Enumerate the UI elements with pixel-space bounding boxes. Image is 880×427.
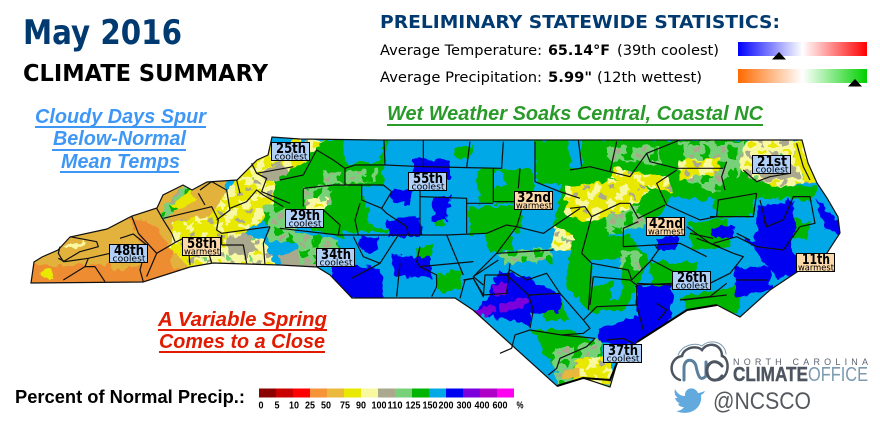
logo: north carolina climate office — [672, 342, 868, 386]
temperature statistic: (39th coolest) — [617, 43, 719, 59]
heading: variable spring — [157, 308, 327, 353]
label: 55th coolest: 55th — [413, 171, 443, 187]
legend tick labels: 90 — [356, 400, 366, 412]
south-east green and tip — [530, 328, 600, 375]
east green — [713, 190, 755, 218]
panel: preliminary statewide statistics — [380, 12, 867, 86]
icon: cloud with NC — [672, 342, 728, 380]
legend tick labels: 5 — [274, 400, 280, 412]
precipitation gauge — [738, 69, 867, 86]
label: 48th coolest — [110, 243, 148, 264]
legend tick labels: 50 — [321, 400, 331, 412]
heading: cloudy days: Cloudy Days Spur — [35, 105, 207, 128]
precipitation statistic — [380, 70, 702, 86]
county lines — [58, 163, 293, 282]
heading: wet weather: Wet Weather Soaks Central, Coastal NC — [387, 103, 764, 125]
state outline and coast — [31, 137, 840, 387]
icon: twitter bird — [675, 388, 705, 413]
purple — [476, 283, 528, 316]
temperature statistic: Average Temperature: — [380, 43, 542, 59]
legend tick labels: 25 — [305, 400, 315, 412]
statistics heading: PRELIMINARY STATEWIDE STATISTICS: — [380, 12, 780, 33]
legend tick labels: 200 — [438, 400, 454, 412]
label: 48th coolest: 48th — [114, 243, 144, 259]
heading: variable spring: A Variable Spring — [157, 308, 327, 331]
label: 37th coolest — [604, 343, 642, 364]
label: 26th coolest: 26th — [677, 270, 707, 286]
logo text: office: OFFICE — [808, 364, 868, 386]
legend tick labels: 125 — [406, 400, 421, 412]
label: 37th coolest: coolest — [606, 354, 640, 364]
label: 58th warmest — [182, 236, 221, 258]
logo text: north carolina: NORTH CAROLINA — [733, 357, 868, 367]
label: 25th coolest — [272, 141, 310, 162]
label: 32nd warmest: 32nd — [517, 190, 551, 206]
label: 26th coolest — [672, 270, 710, 292]
foothills yellow — [169, 139, 326, 267]
label: 42nd warmest: warmest — [648, 228, 685, 238]
label: 34th coolest: coolest — [320, 258, 353, 268]
legend colour bar — [259, 388, 514, 398]
label: 55th coolest: coolest — [412, 182, 445, 192]
label: 42nd warmest — [646, 216, 685, 238]
legend tick labels: 10 — [289, 400, 299, 412]
central green — [467, 205, 522, 235]
label: 34th coolest — [316, 247, 354, 268]
legend tick labels: 600 — [492, 400, 508, 412]
legend tick labels: 100 — [372, 400, 387, 412]
logo text: climate: CLIMATE — [733, 364, 808, 386]
label: 32nd warmest — [514, 190, 553, 212]
label: 26th coolest: coolest — [676, 282, 709, 292]
label: 58th warmest: warmest — [184, 248, 221, 258]
temperature gauge — [738, 42, 867, 60]
twitter handle: @NCSCO — [713, 388, 811, 415]
temperature statistic: 65.14°F — [548, 43, 610, 59]
legend tick labels: 300 — [456, 400, 472, 412]
label: 32nd warmest: warmest — [516, 202, 553, 212]
label: 48th coolest: coolest — [112, 254, 146, 264]
heading: cloudy days: Mean Temps — [61, 150, 180, 173]
subtitle: CLIMATE SUMMARY — [23, 61, 268, 87]
label: 11th warmest: 11th — [802, 252, 830, 268]
label: 21st coolest: coolest — [756, 166, 789, 176]
map: percent of normal precipitation — [15, 130, 850, 395]
label: 55th coolest — [408, 171, 446, 192]
legend tick labels — [258, 400, 524, 412]
heading: cloudy days: Below-Normal — [53, 127, 187, 150]
legend title: Percent of Normal Precip.: — [15, 387, 245, 407]
legend tick labels: 400 — [474, 400, 490, 412]
legend tick labels: 0 — [258, 400, 264, 412]
label: 11th warmest: warmest — [798, 264, 835, 274]
precipitation statistic: (12th wettest) — [597, 70, 702, 86]
label: 29th coolest — [286, 208, 324, 230]
legend tick labels: 110 — [388, 400, 403, 412]
precipitation statistic: Average Precipitation: — [380, 70, 542, 86]
rank labels — [110, 141, 835, 364]
label: 25th coolest: coolest — [274, 152, 308, 162]
legend tick labels: 150 — [422, 400, 438, 412]
piedmont green — [272, 140, 392, 240]
legend: percent of normal precip — [15, 387, 524, 412]
label: 29th coolest: 29th — [290, 208, 320, 224]
legend tick labels: % — [516, 400, 524, 412]
label: 34th coolest: 34th — [321, 247, 351, 263]
west gold — [34, 181, 228, 272]
heading: variable spring: Comes to a Close — [159, 330, 325, 353]
label: 37th coolest: 37th — [608, 343, 638, 359]
dark blue — [328, 158, 840, 348]
temperature statistic — [380, 43, 719, 59]
label: 58th warmest: 58th — [187, 236, 217, 252]
label: 25th coolest: 25th — [276, 141, 306, 157]
title: May 2016 — [23, 13, 182, 53]
label: 21st coolest — [752, 154, 790, 176]
north-east band — [555, 140, 760, 250]
label: 29th coolest: coolest — [288, 220, 322, 230]
label: 42nd warmest: 42nd — [649, 216, 683, 232]
heading: cloudy days — [35, 105, 207, 173]
north-east corner — [738, 140, 815, 188]
label: 21st coolest: 21st — [757, 154, 787, 170]
precipitation statistic: 5.99" — [548, 70, 592, 86]
label: 11th warmest — [796, 252, 835, 274]
legend tick labels: 75 — [340, 400, 350, 412]
